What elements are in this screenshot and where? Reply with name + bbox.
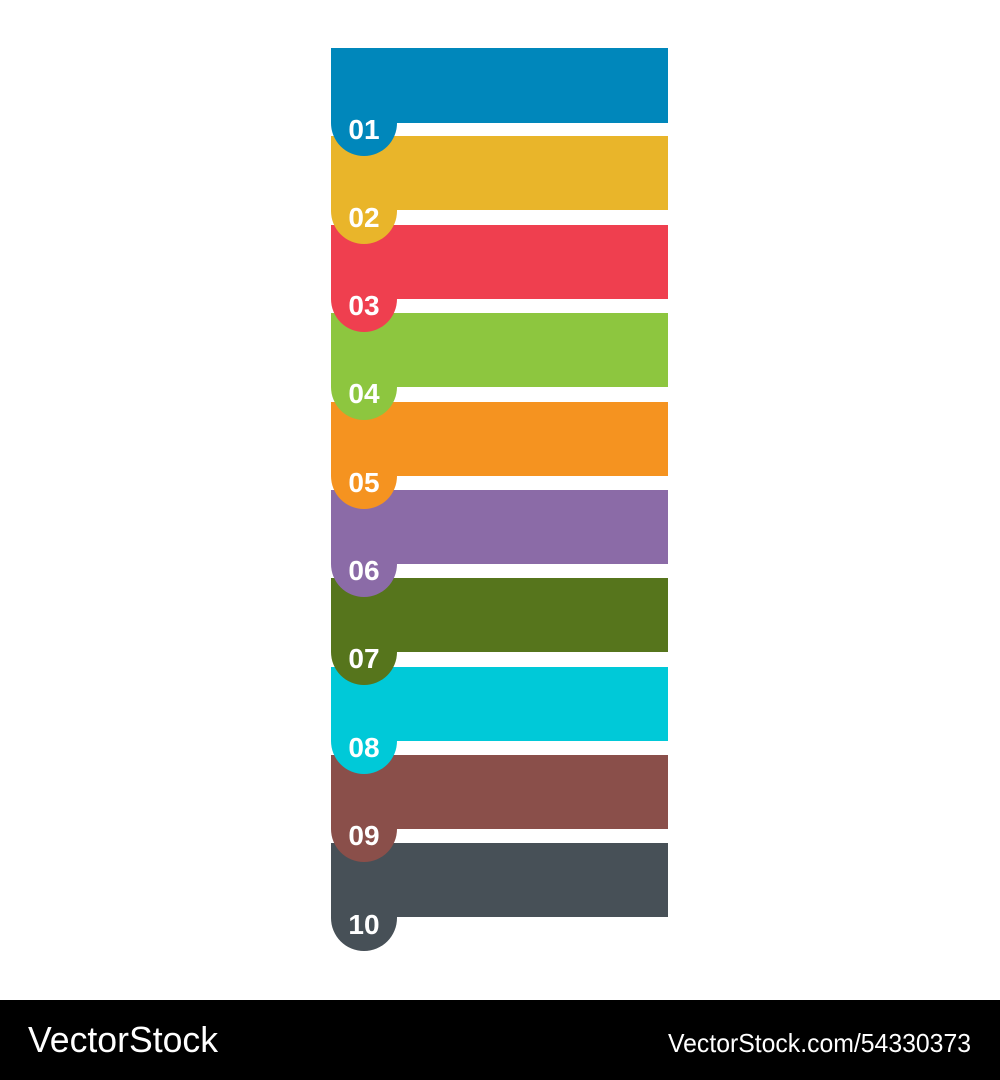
step 01 (331, 48, 668, 156)
footer bar (0, 1000, 1000, 1080)
step 03: 03 (348, 290, 380, 321)
step 04: 04 (348, 378, 380, 409)
step 05 (331, 402, 668, 509)
step 07: 07 (348, 643, 380, 674)
step 10 (331, 843, 668, 951)
step 04 (331, 313, 668, 420)
step 03 (331, 225, 668, 332)
step 06: 06 (348, 555, 380, 586)
step 02 (331, 136, 668, 244)
footer bar: VectorStock (28, 1019, 219, 1060)
step 08: 08 (348, 732, 380, 763)
step 06 (331, 490, 668, 597)
step 10: 10 (348, 909, 380, 940)
step 09: 09 (348, 820, 380, 851)
step 09 (331, 755, 668, 862)
step 07 (331, 578, 668, 685)
step 08 (331, 667, 668, 774)
footer bar: VectorStock.com/54330373 (668, 1028, 971, 1058)
step 02: 02 (348, 202, 380, 233)
step 05: 05 (348, 467, 380, 498)
step 01: 01 (348, 114, 380, 145)
